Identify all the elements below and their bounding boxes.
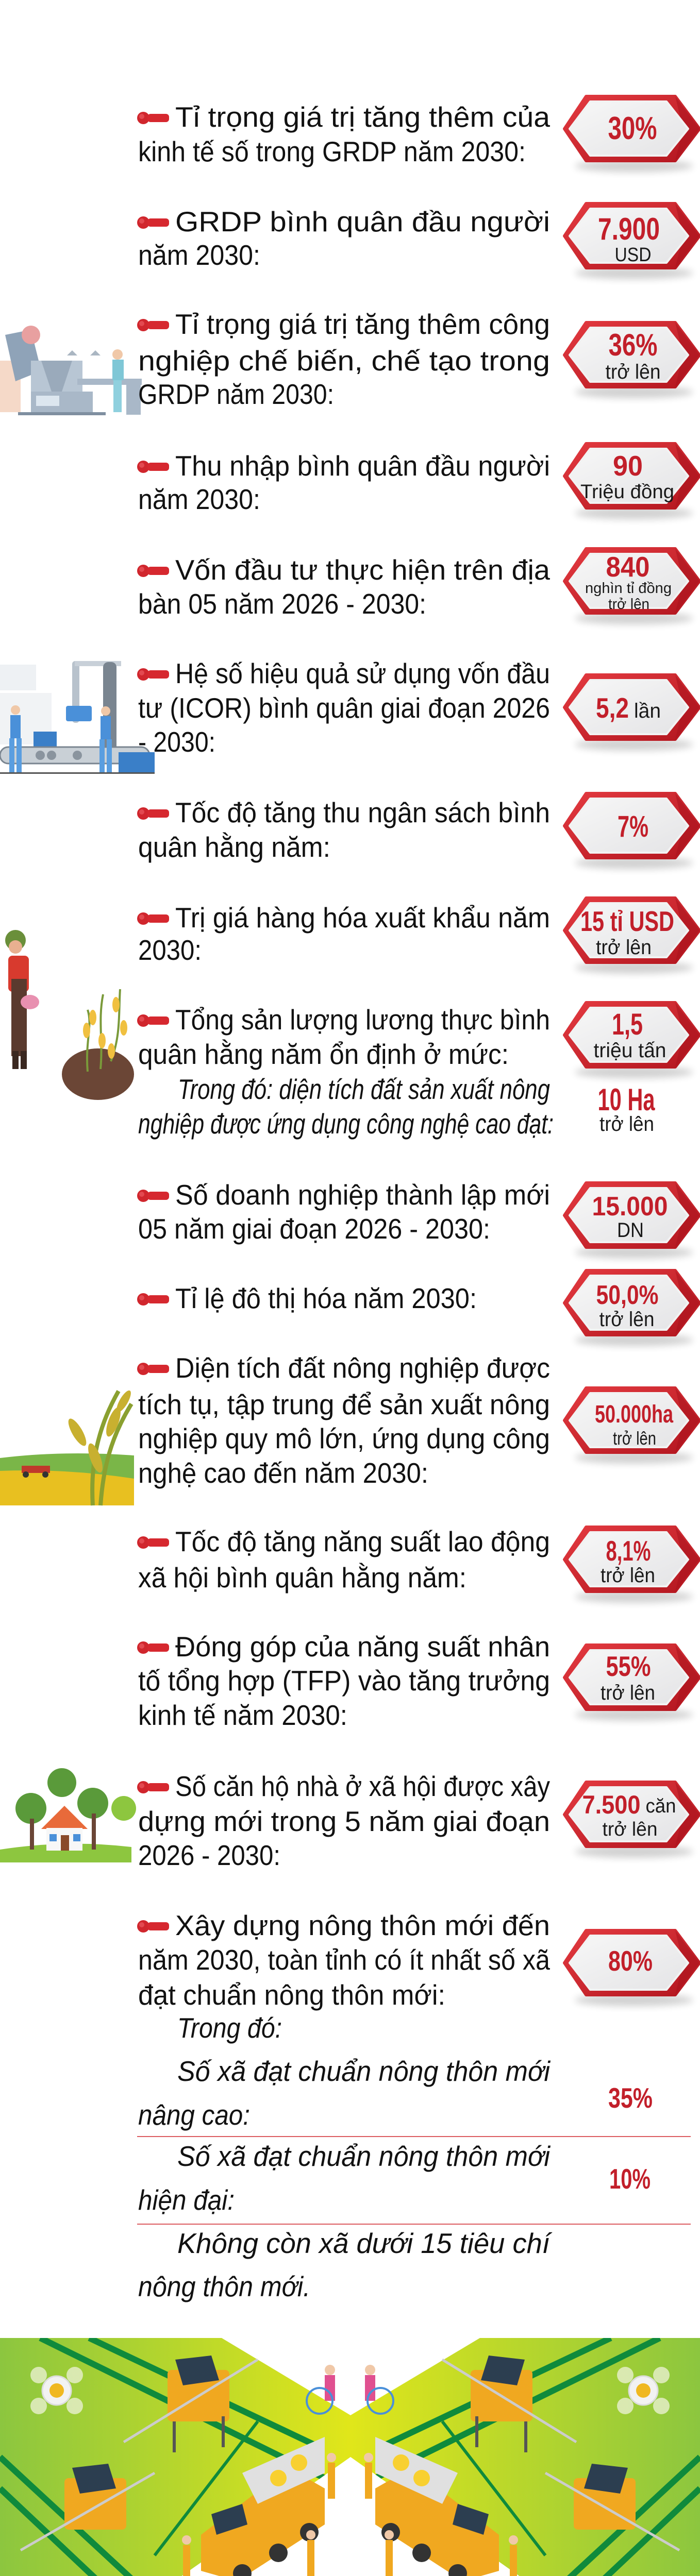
- row 14: 55%: [606, 1650, 651, 1682]
- row 16: hiện đại:: [138, 2184, 235, 2216]
- row 8: trở lên: [596, 936, 652, 959]
- row 9: nghiệp được ứng dụng công nghệ cao đạt:: [138, 1108, 554, 1140]
- row 9: triệu tấn: [594, 1039, 666, 1062]
- illustration: house with trees: [0, 1768, 136, 1862]
- row 6: 5,2: [596, 692, 629, 724]
- row 14: Đóng góp của năng suất nhân: [175, 1631, 550, 1663]
- row 9: trở lên: [599, 1113, 654, 1136]
- row 12: trở lên: [613, 1428, 656, 1449]
- row 10: 05 năm giai đoạn 2026 - 2030:: [138, 1213, 490, 1245]
- row 12: [137, 1352, 699, 1489]
- row 3: [137, 308, 699, 410]
- row 10: Số doanh nghiệp thành lập mới: [175, 1179, 550, 1211]
- row 16: nâng cao:: [138, 2099, 250, 2131]
- row 9: Trong đó: diện tích đất sản xuất nông: [178, 1073, 550, 1105]
- row 11: trở lên: [599, 1308, 655, 1331]
- row 16: năm 2030, toàn tỉnh có ít nhất số xã: [138, 1944, 550, 1976]
- row 13: Tốc độ tăng năng suất lao động: [175, 1526, 550, 1557]
- row 2: năm 2030:: [138, 239, 260, 271]
- row 13: [137, 1526, 699, 1603]
- row 5: 840: [606, 551, 649, 583]
- row 15: dựng mới trong 5 năm giai đoạn: [138, 1805, 550, 1837]
- row 3: Tỉ trọng giá trị tăng thêm công: [175, 308, 550, 340]
- row 16: đạt chuẩn nông thôn mới:: [138, 1979, 445, 2011]
- illustration: robot conveyor: [0, 661, 155, 774]
- row 16: 35%: [608, 2082, 653, 2114]
- row 12: 50.000ha: [595, 1401, 673, 1428]
- row 15: trở lên: [602, 1819, 658, 1840]
- row 2: 7.900: [598, 212, 660, 246]
- row 1: kinh tế số trong GRDP năm 2030:: [138, 135, 526, 167]
- row 15: 2026 - 2030:: [138, 1839, 280, 1871]
- row 16: Số xã đạt chuẩn nông thôn mới: [177, 2140, 551, 2172]
- row 15: căn: [645, 1795, 676, 1817]
- row 3: nghiệp chế biến, chế tạo trong: [138, 345, 550, 377]
- row 15: 7.500: [582, 1790, 640, 1819]
- row 14: kinh tế năm 2030:: [138, 1699, 347, 1731]
- row 11: Tỉ lệ đô thị hóa năm 2030:: [175, 1282, 477, 1314]
- row 1: Tỉ trọng giá trị tăng thêm của: [175, 101, 550, 133]
- row 9: 10 Ha: [598, 1082, 655, 1117]
- row 16: Số xã đạt chuẩn nông thôn mới: [177, 2055, 551, 2087]
- row 16: 10%: [609, 2163, 651, 2195]
- row 16: nông thôn mới.: [138, 2270, 310, 2302]
- row 5: Vốn đầu tư thực hiện trên địa: [175, 554, 550, 586]
- row 10: [137, 1179, 699, 1259]
- row 1: 30%: [608, 111, 657, 146]
- row 16: [137, 1909, 699, 2302]
- row 12: Diện tích đất nông nghiệp được: [175, 1352, 550, 1384]
- row 11: [137, 1270, 699, 1346]
- row 10: 15.000: [592, 1192, 668, 1222]
- row 11: 50,0%: [596, 1280, 659, 1310]
- row 14: [137, 1631, 699, 1731]
- row 8: Trị giá hàng hóa xuất khẩu năm: [175, 902, 550, 934]
- row 12: nghiệp quy mô lớn, ứng dụng công: [138, 1422, 550, 1454]
- row 5: bàn 05 năm 2026 - 2030:: [138, 588, 426, 620]
- row 4: Triệu đồng: [580, 481, 674, 503]
- row 15: Số căn hộ nhà ở xã hội được xây: [175, 1770, 550, 1802]
- row 14: trở lên: [601, 1682, 655, 1704]
- row 3: trở lên: [605, 361, 661, 383]
- row 9: 1,5: [612, 1008, 643, 1041]
- row 7: [137, 793, 699, 869]
- row 15: [137, 1770, 699, 1871]
- row 5: nghìn tỉ đồng: [585, 580, 672, 597]
- row 7: 7%: [618, 810, 648, 843]
- row 2: [137, 204, 699, 279]
- row 13: 8,1%: [606, 1535, 651, 1567]
- row 7: quân hằng năm:: [138, 831, 330, 863]
- row 8: 2030:: [138, 934, 202, 966]
- row 6: - 2030:: [138, 726, 215, 758]
- row 10: DN: [617, 1219, 644, 1242]
- row 9: quân hằng năm ổn định ở mức:: [138, 1038, 509, 1070]
- row 13: trở lên: [601, 1564, 655, 1587]
- row 16: Trong đó:: [177, 2012, 282, 2044]
- row 4: [137, 444, 699, 519]
- row 12: nghệ cao đến năm 2030:: [138, 1457, 428, 1489]
- row 4: 90: [613, 450, 643, 482]
- row 12: tích tụ, tập trung để sản xuất nông: [138, 1388, 550, 1420]
- row 7: Tốc độ tăng thu ngân sách bình: [175, 796, 550, 828]
- illustration: farmer watering plants: [5, 930, 134, 1100]
- row 4: Thu nhập bình quân đầu người: [175, 450, 550, 482]
- row 9: [137, 1003, 699, 1140]
- row 6: tư (ICOR) bình quân giai đoạn 2026: [138, 692, 550, 724]
- illustration: factory: [0, 326, 142, 415]
- row 2: GRDP bình quân đầu người: [175, 206, 550, 238]
- row 16: 80%: [608, 1945, 653, 1977]
- separator lines: [137, 83, 691, 1888]
- row 6: [137, 657, 699, 758]
- row 13: xã hội bình quân hằng năm:: [138, 1562, 466, 1594]
- row 3: GRDP năm 2030:: [138, 378, 334, 410]
- row 3: 36%: [608, 328, 658, 362]
- row 16: Xây dựng nông thôn mới đến: [175, 1909, 550, 1941]
- row 8: [137, 898, 699, 974]
- row 6: Hệ số hiệu quả sử dụng vốn đầu: [175, 657, 550, 689]
- row 5: trở lên: [608, 596, 649, 613]
- row 5: [137, 549, 699, 624]
- row 6: lần: [634, 700, 661, 722]
- row 9: Tổng sản lượng lương thực bình: [175, 1004, 550, 1036]
- row 1: [137, 96, 699, 172]
- row 14: tố tổng hợp (TFP) vào tăng trưởng: [138, 1665, 550, 1697]
- illustration: wheat field: [0, 1388, 134, 1505]
- row 4: năm 2030:: [138, 483, 260, 515]
- row 2: USD: [614, 244, 652, 266]
- row 16: Không còn xã dưới 15 tiêu chí: [177, 2227, 553, 2259]
- illustration: smart farming fields: [0, 2338, 700, 2576]
